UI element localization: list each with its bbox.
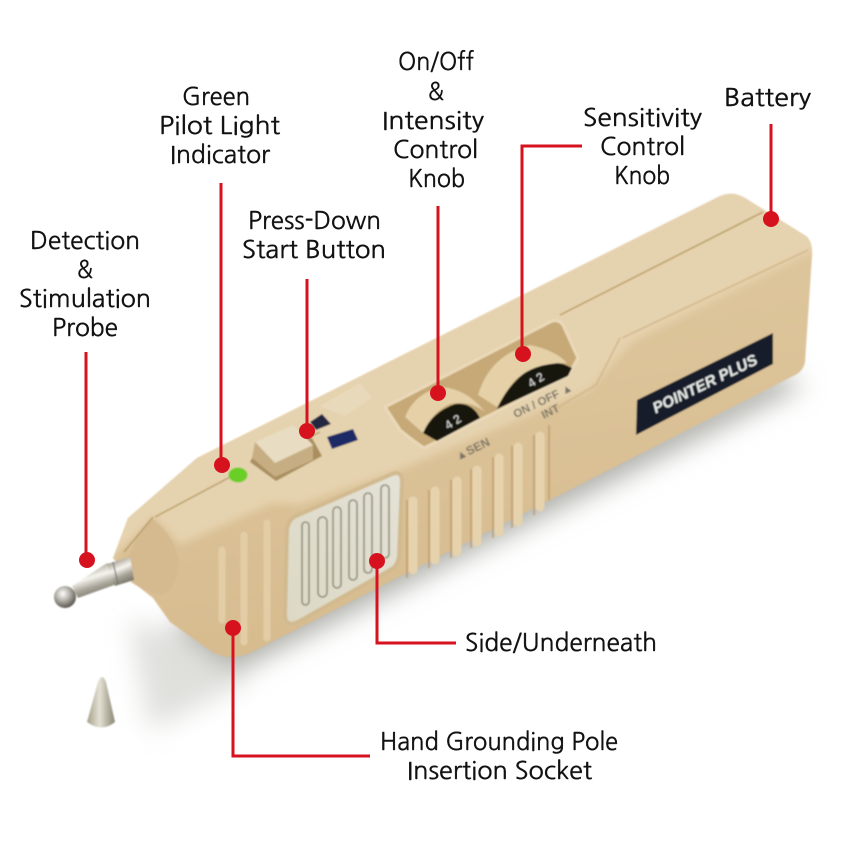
start button: [250, 425, 322, 481]
callout: start button: Start Button: [242, 238, 386, 262]
recessed side panel edge: [550, 250, 808, 412]
shadow under device: [130, 372, 805, 730]
top face: [114, 194, 812, 558]
callout: intensity knob: Knob: [408, 167, 465, 191]
callout: intensity knob: Control: [393, 138, 478, 162]
callout: intensity knob: [382, 50, 484, 401]
SEN label: ▲SEN: [453, 435, 492, 463]
callout: sensitivity knob: Control: [600, 135, 685, 159]
spare metal tip: [87, 677, 115, 728]
callout: green pilot light: Green: [182, 85, 250, 109]
metal probe: [54, 557, 134, 608]
callout: intensity knob: &: [428, 80, 444, 104]
green pilot light: [228, 468, 248, 482]
callout: green pilot light: Indicator: [170, 143, 270, 167]
callout: detection probe: Probe: [52, 316, 118, 340]
knob window: [385, 321, 578, 448]
callout: detection probe: &: [77, 258, 93, 282]
sensitivity knob: [478, 345, 572, 409]
callout: sensitivity knob: Sensitivity: [583, 106, 702, 130]
ON/OFF INT label: INT: [540, 403, 562, 422]
sensitivity knob: 4 2: [525, 369, 547, 390]
ON/OFF INT label: ON / OFF ▲: [512, 382, 575, 421]
callout: grounding socket: Insertion Socket: [407, 759, 592, 783]
side ribs: [222, 425, 549, 642]
device body: [113, 194, 812, 657]
callout: detection probe: Stimulation: [19, 287, 151, 311]
callout: battery: Battery: [724, 86, 811, 110]
callout: grounding socket: Hand Grounding Pole: [380, 730, 618, 754]
callout: green pilot light: [159, 85, 280, 473]
nameplate: [636, 333, 773, 435]
callout: detection probe: Detection: [30, 229, 140, 253]
nose cone: [128, 519, 179, 595]
callout: start button: [242, 209, 386, 439]
grip pad: [285, 473, 402, 624]
intensity knob: [405, 387, 485, 441]
seam line: [124, 212, 763, 552]
callout: side/underneath: [369, 553, 657, 655]
callout: detection probe: [19, 229, 151, 568]
callout: sensitivity knob: [515, 106, 702, 362]
callout: intensity knob: On/Off: [398, 50, 474, 74]
intensity knob: 4 2: [442, 411, 464, 432]
callout: battery: [724, 86, 811, 227]
device: Pointer Plus pen: [54, 170, 830, 728]
callout: grounding socket: [225, 620, 618, 783]
callout: side/underneath: Side/Underneath: [465, 631, 657, 655]
switch labels: [310, 414, 358, 449]
callout: intensity knob: Intensity: [382, 109, 484, 133]
nameplate: POINTER PLUS: [650, 351, 761, 417]
callout: sensitivity knob: Knob: [614, 164, 670, 188]
callout: green pilot light: Pilot Light: [159, 114, 280, 138]
callout: start button: Press-Down: [248, 209, 381, 233]
ridge beside start button: [320, 383, 372, 416]
